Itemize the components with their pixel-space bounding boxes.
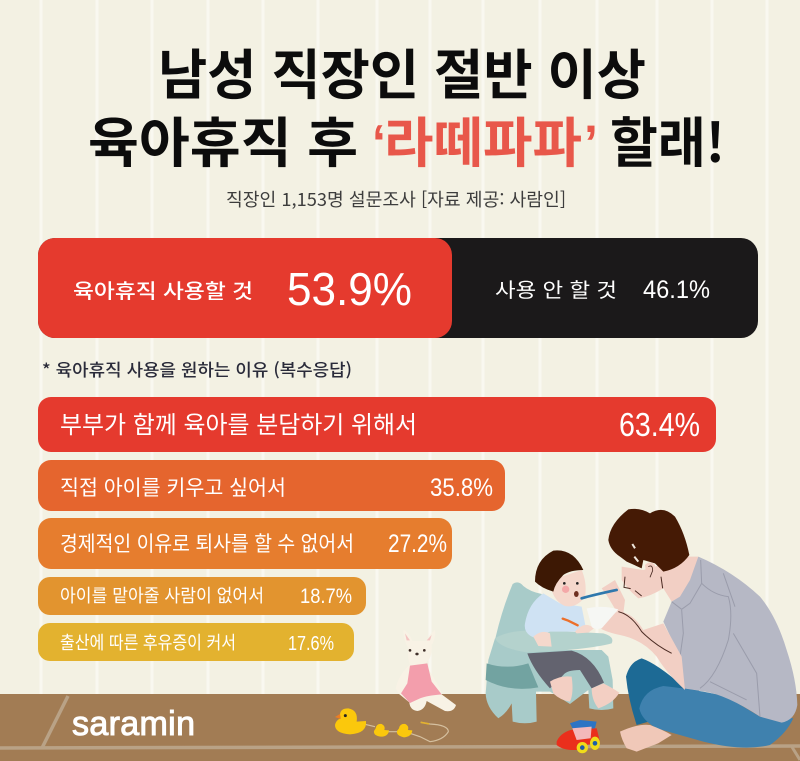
bar: postpartum depression: 출산에 따른 후유증이 커서	[60, 629, 236, 655]
floor	[0, 694, 800, 761]
hair	[608, 509, 689, 572]
baby	[525, 550, 619, 708]
bar: economic reasons	[38, 518, 452, 569]
icon: bunny doll	[396, 630, 456, 711]
title: 남성 직장인 절반 이상	[158, 31, 646, 110]
bar chart: reasons	[38, 397, 716, 661]
title: 라떼파파	[384, 99, 582, 178]
value: 53.9%: 53.9%	[287, 263, 412, 315]
father	[595, 509, 797, 752]
title: 할래!	[610, 99, 725, 178]
title: ’	[584, 115, 598, 171]
icon: high chair	[486, 582, 613, 723]
front leg jeans	[639, 686, 793, 748]
icon: toy car	[557, 720, 600, 753]
panel: use vs not use parental leave	[38, 238, 758, 338]
title: 육아휴직 후	[88, 99, 358, 178]
value: 46.1%: 46.1%	[643, 276, 710, 304]
label: will use: 육아휴직 사용할 것	[73, 275, 253, 304]
bar: raise child directly	[38, 460, 505, 511]
bar: raise child directly: 35.8%	[430, 474, 493, 502]
title: ‘	[372, 115, 386, 171]
back leg jeans	[626, 658, 700, 725]
bar: no caregiver	[38, 577, 366, 615]
neck and face	[622, 557, 698, 602]
bar: economic reasons: 27.2%	[388, 530, 447, 558]
bar: postpartum depression: 17.6%	[288, 633, 334, 655]
red segment: will use	[38, 238, 452, 338]
bar: share childcare	[38, 397, 716, 452]
shirt	[663, 557, 797, 723]
icon: yellow ducks and pull string	[335, 708, 448, 742]
bar: raise child directly: 직접 아이를 키우고 싶어서	[60, 472, 286, 502]
section heading: * 육아휴직 사용을 원하는 이유 (복수응답)	[42, 356, 352, 381]
forearm and hand	[595, 612, 685, 690]
saramin logo: saramin	[72, 705, 195, 743]
title	[88, 31, 725, 178]
bar: share childcare: 63.4%	[619, 406, 700, 443]
label: will not use: 사용 안 할 것	[495, 274, 617, 303]
bar: postpartum depression	[38, 623, 354, 661]
bar: share childcare: 부부가 함께 육아를 분담하기 위해서	[60, 405, 417, 440]
bar: economic reasons: 경제적인 이유로 퇴사를 할 수 없어서	[60, 528, 354, 558]
bowl and spoon	[582, 590, 618, 629]
foot	[620, 725, 672, 752]
bar: no caregiver: 아이를 맡아줄 사람이 없어서	[60, 582, 264, 608]
bar: no caregiver: 18.7%	[300, 585, 352, 608]
black segment: will not use	[38, 238, 758, 338]
subtitle: 직장인 1,153명 설문조사 [자료 제공: 사람인]	[226, 186, 566, 212]
high chair and baby	[486, 550, 619, 723]
